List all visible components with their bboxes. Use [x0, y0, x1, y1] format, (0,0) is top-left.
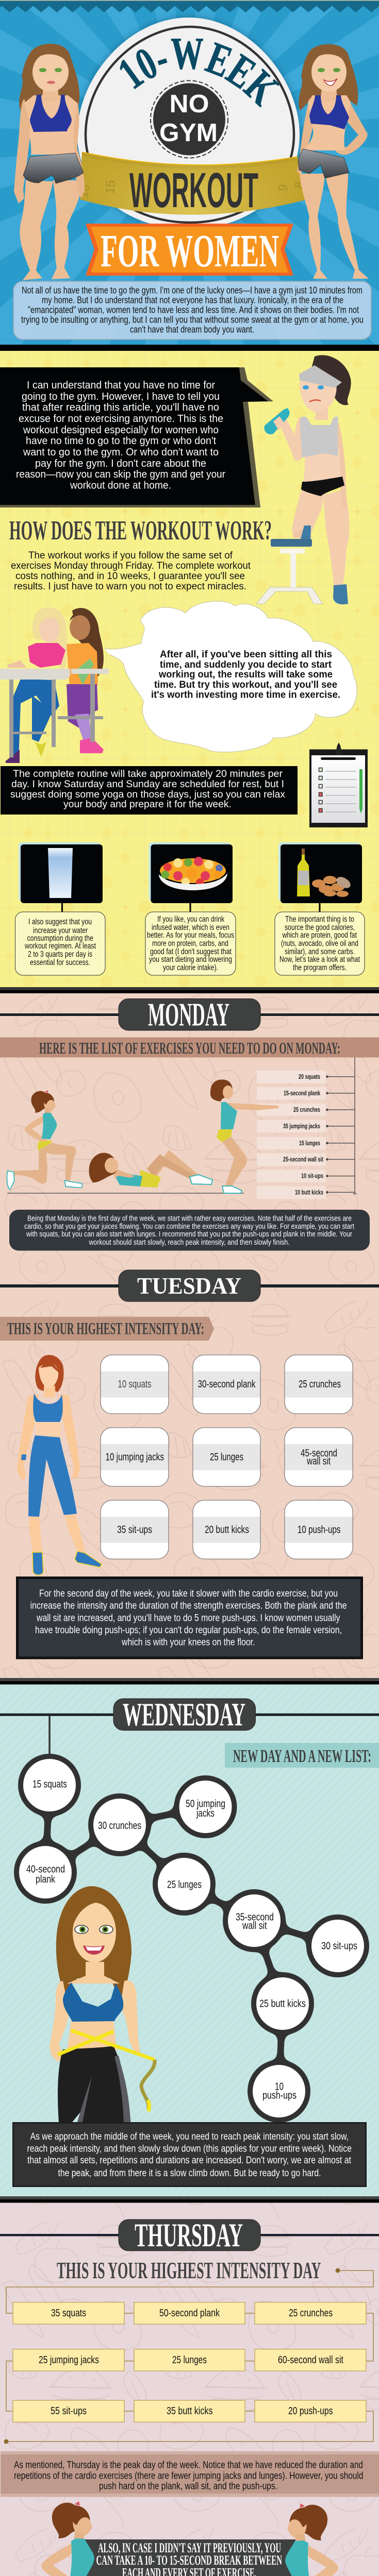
- chain: Wednesday exercises: 15 squats: [32, 1778, 67, 1790]
- figure: two women at desks: [0, 607, 109, 763]
- callout: no time for the gym: I can understand that you have no time for: [27, 380, 215, 391]
- chain: Wednesday exercises: wall sit: [242, 1920, 267, 1931]
- text block: how it works: [11, 550, 251, 592]
- chain: Wednesday exercises: 25 lunges: [167, 1879, 202, 1891]
- grid: Tuesday exercise cards: 10 squats: [118, 1379, 152, 1390]
- flow: Thursday exercises: 55 sit-ups: [51, 2405, 87, 2417]
- top zigzag border: [0, 0, 379, 13]
- grid: Tuesday exercise cards: 25 lunges: [210, 1452, 243, 1463]
- banner: for women: [86, 224, 293, 277]
- note: infused water and meals: your calorie intake).: [163, 963, 218, 972]
- heading: Thursday: THURSDAY: [135, 2217, 243, 2254]
- note: infused water and meals: infused water, which is even: [152, 923, 229, 932]
- list: Monday exercises: 25-second wall sit: [283, 1155, 323, 1163]
- figure: woman after: [297, 44, 369, 279]
- grid: Tuesday exercise cards: 45-second: [301, 1448, 337, 1459]
- figure: woman before: [14, 44, 85, 280]
- title badge: 10-week no gym workout: [77, 14, 307, 224]
- figure: squat exercise: [210, 1079, 279, 1193]
- grid: Tuesday exercise cards: wall sit: [306, 1456, 331, 1467]
- grid: Tuesday exercise cards: 25 crunches: [299, 1379, 341, 1390]
- speech bubble: worth investing more time: [104, 601, 357, 752]
- flow: Thursday exercises: 50-second plank: [159, 2308, 220, 2319]
- panel: Monday explanation: workout should start slowly, reach peak intensity, and then slowly finish.: [89, 1238, 290, 1247]
- chain: Wednesday exercises: 40-second: [26, 1864, 65, 1875]
- note: drink more water: workout regimen. At least: [24, 942, 96, 951]
- figure: woman measuring waist: [50, 1886, 155, 2122]
- section background: Thursday and Friday pink: [0, 2202, 379, 2576]
- figure: woman with water bottle on stool: [256, 355, 351, 604]
- list: Monday exercises: 20 squats: [299, 1073, 320, 1080]
- heading: Thursday: [0, 2217, 379, 2254]
- band: Thursday explanation: [1, 2451, 379, 2497]
- list: Monday exercises: 15 lunges: [299, 1139, 320, 1147]
- speech bubble: worth investing more time: time. But try this workout, and you'll see: [154, 680, 337, 690]
- flow: Thursday exercises: 35 squats: [51, 2308, 86, 2319]
- note: good calories: similar), and some carbs.: [285, 947, 355, 956]
- section background: hero sunburst: [0, 0, 379, 345]
- badge ring: [86, 27, 294, 223]
- note: drink more water: increase your water: [33, 926, 88, 935]
- chain: Wednesday exercises: 30 crunches: [98, 1820, 141, 1832]
- chain: Wednesday exercises: push-ups: [262, 2090, 296, 2101]
- chain: Wednesday exercises: 10: [275, 2081, 284, 2093]
- callout: no time for the gym: reason—now you can skip the gym and get your: [16, 469, 225, 480]
- measuring tape band: 15: [103, 180, 118, 194]
- list: Monday exercises: 10 sit-ups: [301, 1172, 323, 1180]
- text block: how it works: results. I just have to warn you not to expect miracles.: [14, 581, 246, 592]
- panel: Wednesday explanation: [12, 2122, 367, 2187]
- badge egg: [77, 18, 300, 229]
- flow: Thursday exercises: [4, 2268, 373, 2444]
- note: drink more water: I also suggest that you: [28, 918, 92, 926]
- band: highest intensity: [0, 1317, 214, 1341]
- figure: woman in blue: [17, 1355, 102, 1575]
- grid: Tuesday exercise cards: 20 butt kicks: [205, 1524, 249, 1535]
- NO GYM circle: NO: [169, 90, 209, 118]
- ground line: [7, 1193, 244, 1194]
- chain: Wednesday exercises: 30 sit-ups: [321, 1940, 357, 1952]
- measuring tape band: [77, 152, 307, 215]
- note: good calories: [275, 912, 365, 975]
- heading: Monday: [0, 996, 379, 1032]
- section background: Monday and Tuesday peach: [0, 993, 379, 1678]
- panel: Tuesday explanation: which is with your knees on the floor.: [121, 1637, 255, 1648]
- food doodle pattern peach: [0, 993, 379, 1678]
- chain: Wednesday exercises: 50 jumping: [186, 1798, 225, 1809]
- figure: lunge facing right: [12, 2501, 136, 2576]
- note: infused water and meals: good fat (I don't suggest that: [150, 947, 232, 956]
- callout: no time for the gym: workout designed especially for women who: [23, 425, 219, 436]
- measuring tape band: 16: [77, 183, 92, 199]
- heading: Wednesday: WEDNESDAY: [123, 1696, 245, 1733]
- note: good calories: the program offers.: [293, 963, 347, 972]
- note: infused water and meals: you start dieting and lowering: [149, 955, 232, 964]
- list: Monday exercises: 15-second plank: [284, 1089, 321, 1097]
- note: drink more water: consumption during the: [27, 934, 93, 943]
- heading: Tuesday: TUESDAY: [137, 1273, 241, 1299]
- note: drink more water: 2 to 3 quarts per day is: [28, 950, 92, 959]
- tip: food: [145, 842, 236, 975]
- section divider: [0, 2196, 379, 2203]
- flow: Thursday exercises: 25 lunges: [172, 2354, 207, 2366]
- callout: no time for the gym: want to go to the gym. Or who don't want to: [23, 447, 219, 458]
- section divider: [0, 987, 379, 993]
- note: drink more water: [15, 912, 105, 975]
- yellow pattern: [0, 351, 379, 987]
- panel: routine length: your body and prepare it for the week.: [63, 799, 232, 810]
- section divider: [0, 1678, 379, 1685]
- band: highest intensity: THIS IS YOUR HIGHEST INTENSITY DAY:: [7, 1320, 204, 1338]
- panel: Monday explanation: [9, 1210, 370, 1251]
- figure: lunge facing left: [243, 2503, 368, 2576]
- speech bubble: worth investing more time: it's worth investing more time in exercise.: [151, 689, 340, 701]
- callout: no time for the gym: [0, 367, 273, 507]
- callout: no time for the gym: going to the gym. However, I have to tell you: [22, 391, 220, 402]
- speech bubble: worth investing more time: After all, if you've been sitting all this: [160, 649, 332, 660]
- grid: Tuesday exercise cards: 30-second plank: [198, 1379, 256, 1390]
- panel: introduction text: can't have that dream body you want.: [130, 325, 254, 335]
- callout: no time for the gym: that after reading this article, you'll have no: [22, 402, 219, 413]
- callout: no time for the gym: pay for the gym. I don't care about the: [35, 458, 206, 469]
- list: Monday exercises: 10 butt kicks: [295, 1188, 323, 1196]
- note: good calories: The important thing is to: [285, 915, 354, 924]
- grid: Tuesday exercise cards: 10 jumping jacks: [105, 1452, 164, 1463]
- text block: how it works: costs nothing, and in 10 weeks, I guarantee you'll see: [15, 571, 245, 582]
- flow: Thursday exercises: 25 jumping jacks: [39, 2354, 99, 2366]
- measuring tape band: 9: [276, 183, 291, 192]
- flow: Thursday exercises: 20 push-ups: [288, 2405, 333, 2417]
- note: infused water and meals: [145, 912, 236, 975]
- panel: rest between sets: [82, 2539, 298, 2576]
- list: Monday exercises: 25 crunches: [293, 1106, 320, 1113]
- chain: Wednesday exercises: plank: [36, 1874, 56, 1885]
- heading: 10-WEEK: 10-WEEK: [120, 39, 279, 108]
- NO GYM circle: [151, 80, 228, 158]
- band: Thursday explanation: push hard on the plank, wall sit, and the push-ups.: [99, 2481, 277, 2492]
- list: Monday exercises: 35 jumping jacks: [283, 1122, 320, 1130]
- speech bubble: worth investing more time: time, and suddenly you decide to start: [160, 659, 332, 670]
- callout: no time for the gym: have no time to go to the gym or who don't: [26, 435, 216, 447]
- heading: Tuesday: [0, 1270, 379, 1301]
- flow: Thursday exercises: 35 butt kicks: [167, 2405, 212, 2417]
- panel: routine length: [1, 766, 298, 815]
- heading: Wednesday: [0, 1696, 379, 1755]
- panel: Wednesday explanation: the peak, and from there it is a slow climb down. But be ready to go hard.: [58, 2167, 321, 2179]
- tip: water: [15, 842, 105, 975]
- grid: Tuesday exercise cards: 10 push-ups: [298, 1524, 340, 1535]
- card: olive oil and almonds: [278, 842, 362, 903]
- measuring tape band: 8: [292, 180, 307, 190]
- panel: routine length: The complete routine will take approximately 20 minutes per: [13, 768, 283, 779]
- section background: introduction yellow: [0, 351, 379, 987]
- callout: no time for the gym: excuse for not exercising anymore. This is the: [19, 413, 223, 425]
- panel: introduction text: [13, 281, 371, 340]
- note: good calories: which are protein, good fat: [282, 931, 357, 940]
- note: infused water and meals: more on protein, carbs, and: [152, 939, 228, 948]
- section divider: [0, 345, 379, 351]
- chain: Wednesday exercises: 25 butt kicks: [259, 1998, 306, 2009]
- figure: lunge exercise: [7, 1090, 83, 1190]
- list: Monday exercises: [257, 1057, 357, 1199]
- panel: Tuesday explanation: [16, 1577, 363, 1659]
- flow: Thursday exercises: 60-second wall sit: [278, 2354, 343, 2366]
- icon: clipboard checklist: [309, 742, 368, 827]
- note: drink more water: essential for success.: [30, 958, 90, 967]
- grid: Tuesday exercise cards: [101, 1355, 353, 1559]
- chain: Wednesday exercises: jacks: [196, 1808, 215, 1819]
- chain: Wednesday exercises: 35-second: [236, 1911, 274, 1923]
- tip: good calories: [275, 842, 365, 975]
- note: infused water and meals: better. As for your meals, focus: [147, 931, 234, 940]
- figure: crunch exercise: [89, 1150, 212, 1188]
- heading: Monday: MONDAY: [148, 996, 229, 1032]
- note: infused water and meals: If you like, you can drink: [157, 915, 224, 924]
- food doodle pattern pink: [0, 2203, 379, 2576]
- card: fruit bowl: [149, 842, 233, 903]
- panel: routine length: suggest doing some yoga on those days, just so you can relax: [10, 789, 285, 800]
- section background: Wednesday teal: [0, 1684, 379, 2196]
- speech bubble: worth investing more time: working out, the results will take some: [158, 669, 333, 680]
- callout: no time for the gym: workout done at home.: [70, 480, 171, 492]
- NO GYM circle: GYM: [159, 119, 218, 147]
- card: water glass: [19, 842, 103, 903]
- note: good calories: source the good calories,: [285, 923, 355, 932]
- chain: Wednesday exercises: [14, 1754, 369, 2123]
- grid: Tuesday exercise cards: 35 sit-ups: [117, 1524, 152, 1535]
- text block: how it works: exercises Monday through Friday. The complete workout: [11, 561, 251, 571]
- flow: Thursday exercises: 25 crunches: [289, 2308, 333, 2319]
- panel: routine length: day. I know Saturday and Sunday are scheduled for rest, but I: [11, 778, 284, 790]
- text block: how it works: The workout works if you follow the same set of: [28, 550, 233, 561]
- note: good calories: (nuts, avocado, olive oil and: [281, 939, 358, 948]
